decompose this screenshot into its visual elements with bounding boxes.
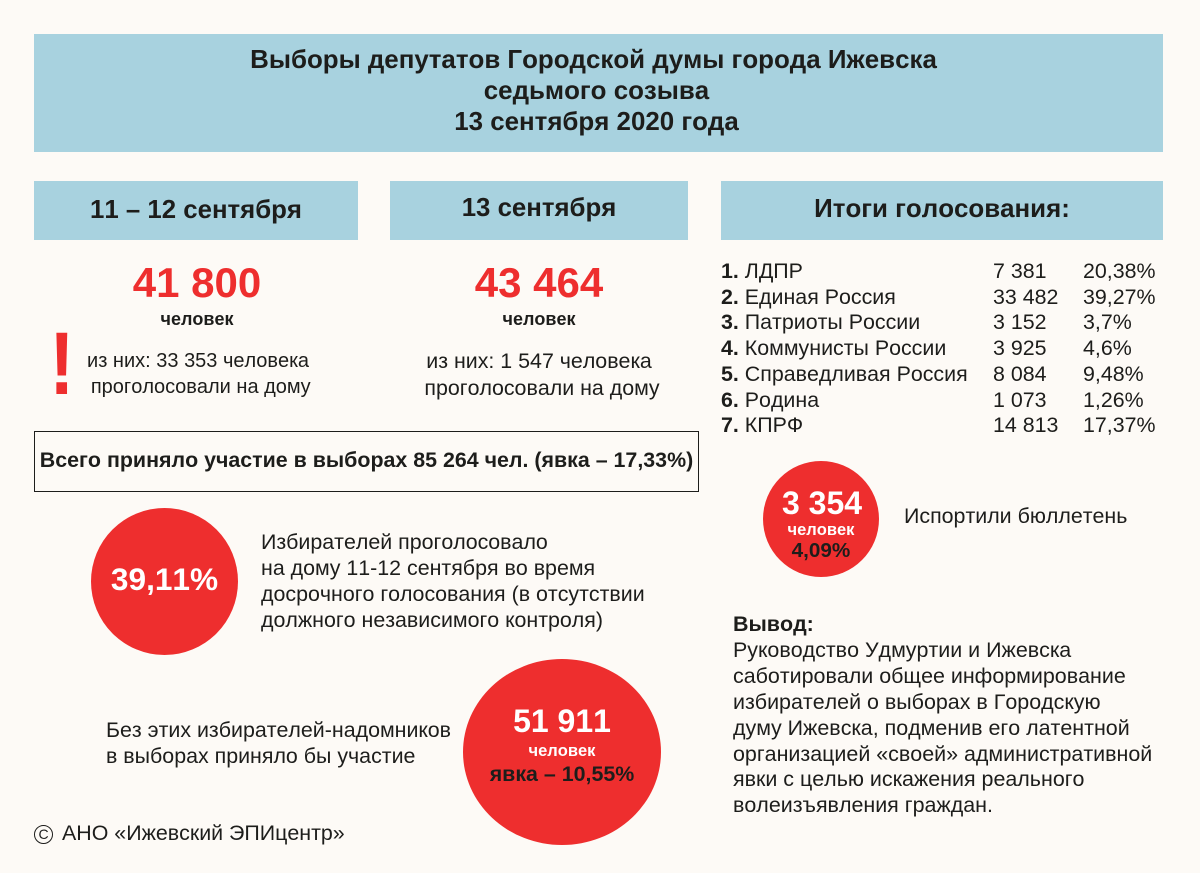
circle: spoiled ballots: 3 354 [782,485,862,521]
conclusion text: Руководство Удмуртии и Ижевска [733,638,1071,662]
circle: 51 911 [463,659,661,845]
results table [721,259,1156,437]
column: vote counts: 33 482 [993,285,1058,309]
column: vote counts: 8 084 [993,362,1047,386]
text: without home voters [106,718,451,768]
number: 41 800 voters: 41 800 [133,259,261,306]
circle: spoiled ballots: человек [788,521,854,539]
text: home voters explanation: Избирателей проголосовало [261,530,548,554]
text: spoiled ballots: Испортили бюллетень [904,504,1127,528]
circle: spoiled ballots [763,461,879,577]
total turnout box [34,431,699,492]
title banner: седьмого созыва [484,77,709,105]
column: percentages: 4,6% [1083,336,1132,360]
copyright: C [38,826,49,842]
total turnout box: Всего приняло участие в выборах 85 264 чел. (явка – 17,33%) [40,448,693,472]
conclusion text: явки с целью искажения реального [733,767,1084,791]
title banner: 13 сентября 2020 года [454,108,739,136]
header: voting results [721,181,1163,240]
text: home voting 13 [424,349,660,400]
header: voting results: Итоги голосования: [814,195,1070,223]
header: 13 September: 13 сентября [462,194,616,222]
column: vote counts: 1 073 [993,388,1047,412]
column: vote counts: 14 813 [993,413,1058,437]
number: 41 800 voters [133,259,261,329]
header: 11-12 September: 11 – 12 сентября [90,196,302,224]
circle: 39,11% [91,508,238,655]
conclusion text: избирателей о выборах в Городскую [733,690,1101,714]
circle: 39,11%: 39,11% [111,561,218,597]
column: vote counts: 3 152 [993,310,1047,334]
column: percentages: 20,38% [1083,259,1156,283]
column: party names: 6. Родина [721,388,819,412]
text: home voters explanation [261,530,645,632]
conclusion text [733,612,1152,817]
column: percentages [1083,259,1156,437]
text: home voters explanation: досрочного голосования (в отсутствии [261,582,645,606]
column: party names: 7. КПРФ [721,413,803,437]
text: home voting 13: из них: 1 547 человека [426,349,652,373]
copyright: АНО «Ижевский ЭПИцентр» [62,821,345,845]
text: home voters explanation: должного независимого контроля) [261,608,603,632]
circle: 51 911: явка – 10,55% [490,762,634,786]
column: percentages: 3,7% [1083,310,1132,334]
title banner [34,34,1163,152]
column: party names: 5. Справедливая Россия [721,362,968,386]
conclusion text: думу Ижевска, подменив его латентной [733,716,1130,740]
text: without home voters: в выборах приняло бы участие [106,744,415,768]
column: party names: 3. Патриоты России [721,310,920,334]
number: 43 464 voters [475,259,603,329]
icon: exclamation mark: ! [49,313,74,413]
number: 43 464 voters: человек [502,309,575,329]
column: percentages: 39,27% [1083,285,1156,309]
text: home voting 13: проголосовали на дому [424,376,660,400]
header: 11-12 September [34,181,358,240]
column: party names: 2. Единая Россия [721,285,896,309]
column: party names [721,259,968,437]
column: party names: 1. ЛДПР [721,259,803,283]
text: without home voters: Без этих избирателей-надомников [106,718,451,742]
circle: 51 911: человек [529,742,595,760]
title banner: Выборы депутатов Городской думы города Ижевска [250,46,937,74]
column: vote counts [993,259,1058,437]
text: home voting 11-12: из них: 33 353 человека [87,350,309,372]
conclusion text: организацией «своей» административной [733,742,1152,766]
column: vote counts: 7 381 [993,259,1047,283]
column: percentages: 1,26% [1083,388,1144,412]
text: home voting 11-12 [87,350,311,398]
number: 41 800 voters: человек [160,309,233,329]
header: 13 September [390,181,688,240]
conclusion text: волеизъявления граждан. [733,793,993,817]
conclusion text: саботировали общее информирование [733,664,1126,688]
number: 43 464 voters: 43 464 [475,259,603,306]
column: party names: 4. Коммунисты России [721,336,946,360]
conclusion text: Вывод: [733,612,814,636]
column: percentages: 17,37% [1083,413,1156,437]
circle: 51 911: 51 911 [513,703,611,739]
circle: spoiled ballots: 4,09% [792,539,850,562]
text: home voters explanation: на дому 11-12 сентября во время [261,556,595,580]
text: home voting 11-12: проголосовали на дому [91,376,311,398]
column: vote counts: 3 925 [993,336,1047,360]
column: percentages: 9,48% [1083,362,1144,386]
